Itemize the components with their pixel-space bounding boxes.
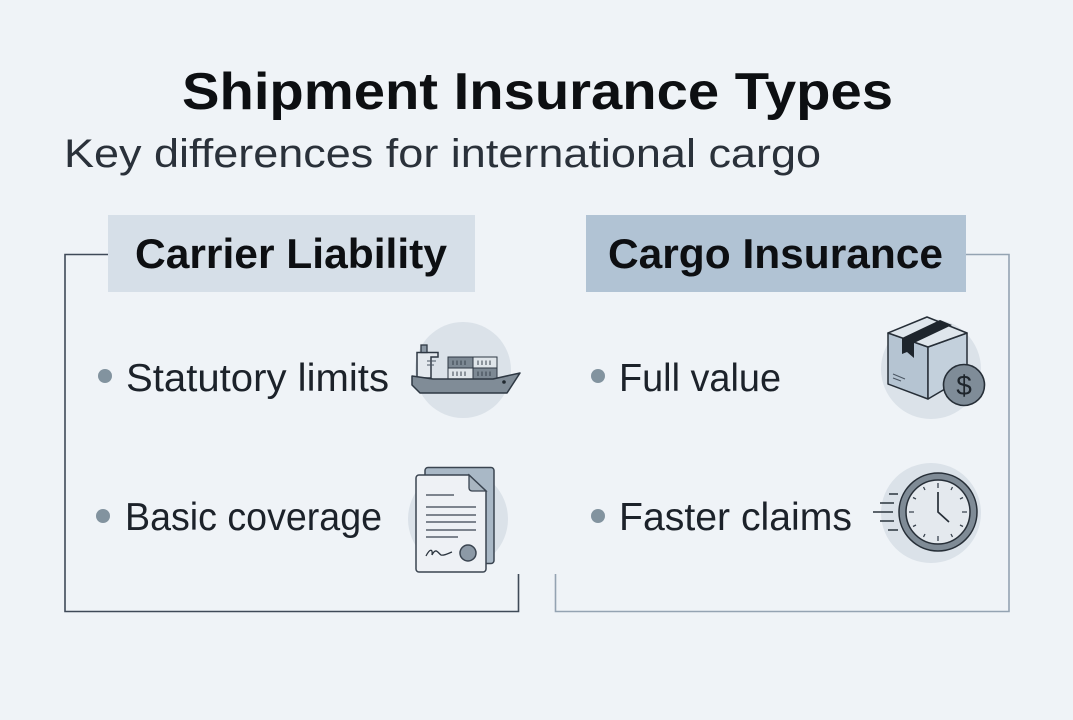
header: carrier liability: Carrier Liability bbox=[135, 230, 448, 277]
icon: parcel with dollar coin: $ bbox=[956, 370, 972, 401]
panel: cargo insurance bbox=[556, 215, 1009, 612]
panel: carrier liability bbox=[65, 215, 520, 612]
icon: fast clock bbox=[873, 463, 981, 563]
panel frame: cargo insurance bbox=[556, 254, 1009, 612]
bullet: faster claims: Faster claims bbox=[619, 496, 852, 539]
title: Shipment Insurance Types bbox=[182, 63, 893, 121]
icon: policy document bbox=[408, 468, 508, 572]
icon: parcel with dollar coin bbox=[881, 317, 984, 419]
icon: container ship bbox=[412, 322, 520, 418]
header: cargo insurance bbox=[586, 215, 966, 292]
bullet: statutory limits: Statutory limits bbox=[126, 357, 389, 400]
bullet: basic coverage: Basic coverage bbox=[125, 496, 382, 539]
bullet: full value: Full value bbox=[619, 357, 781, 400]
subtitle: Key differences for international cargo bbox=[64, 132, 821, 176]
header: carrier liability bbox=[108, 215, 475, 292]
panel frame: carrier liability bbox=[65, 254, 518, 612]
header: cargo insurance: Cargo Insurance bbox=[608, 230, 943, 277]
